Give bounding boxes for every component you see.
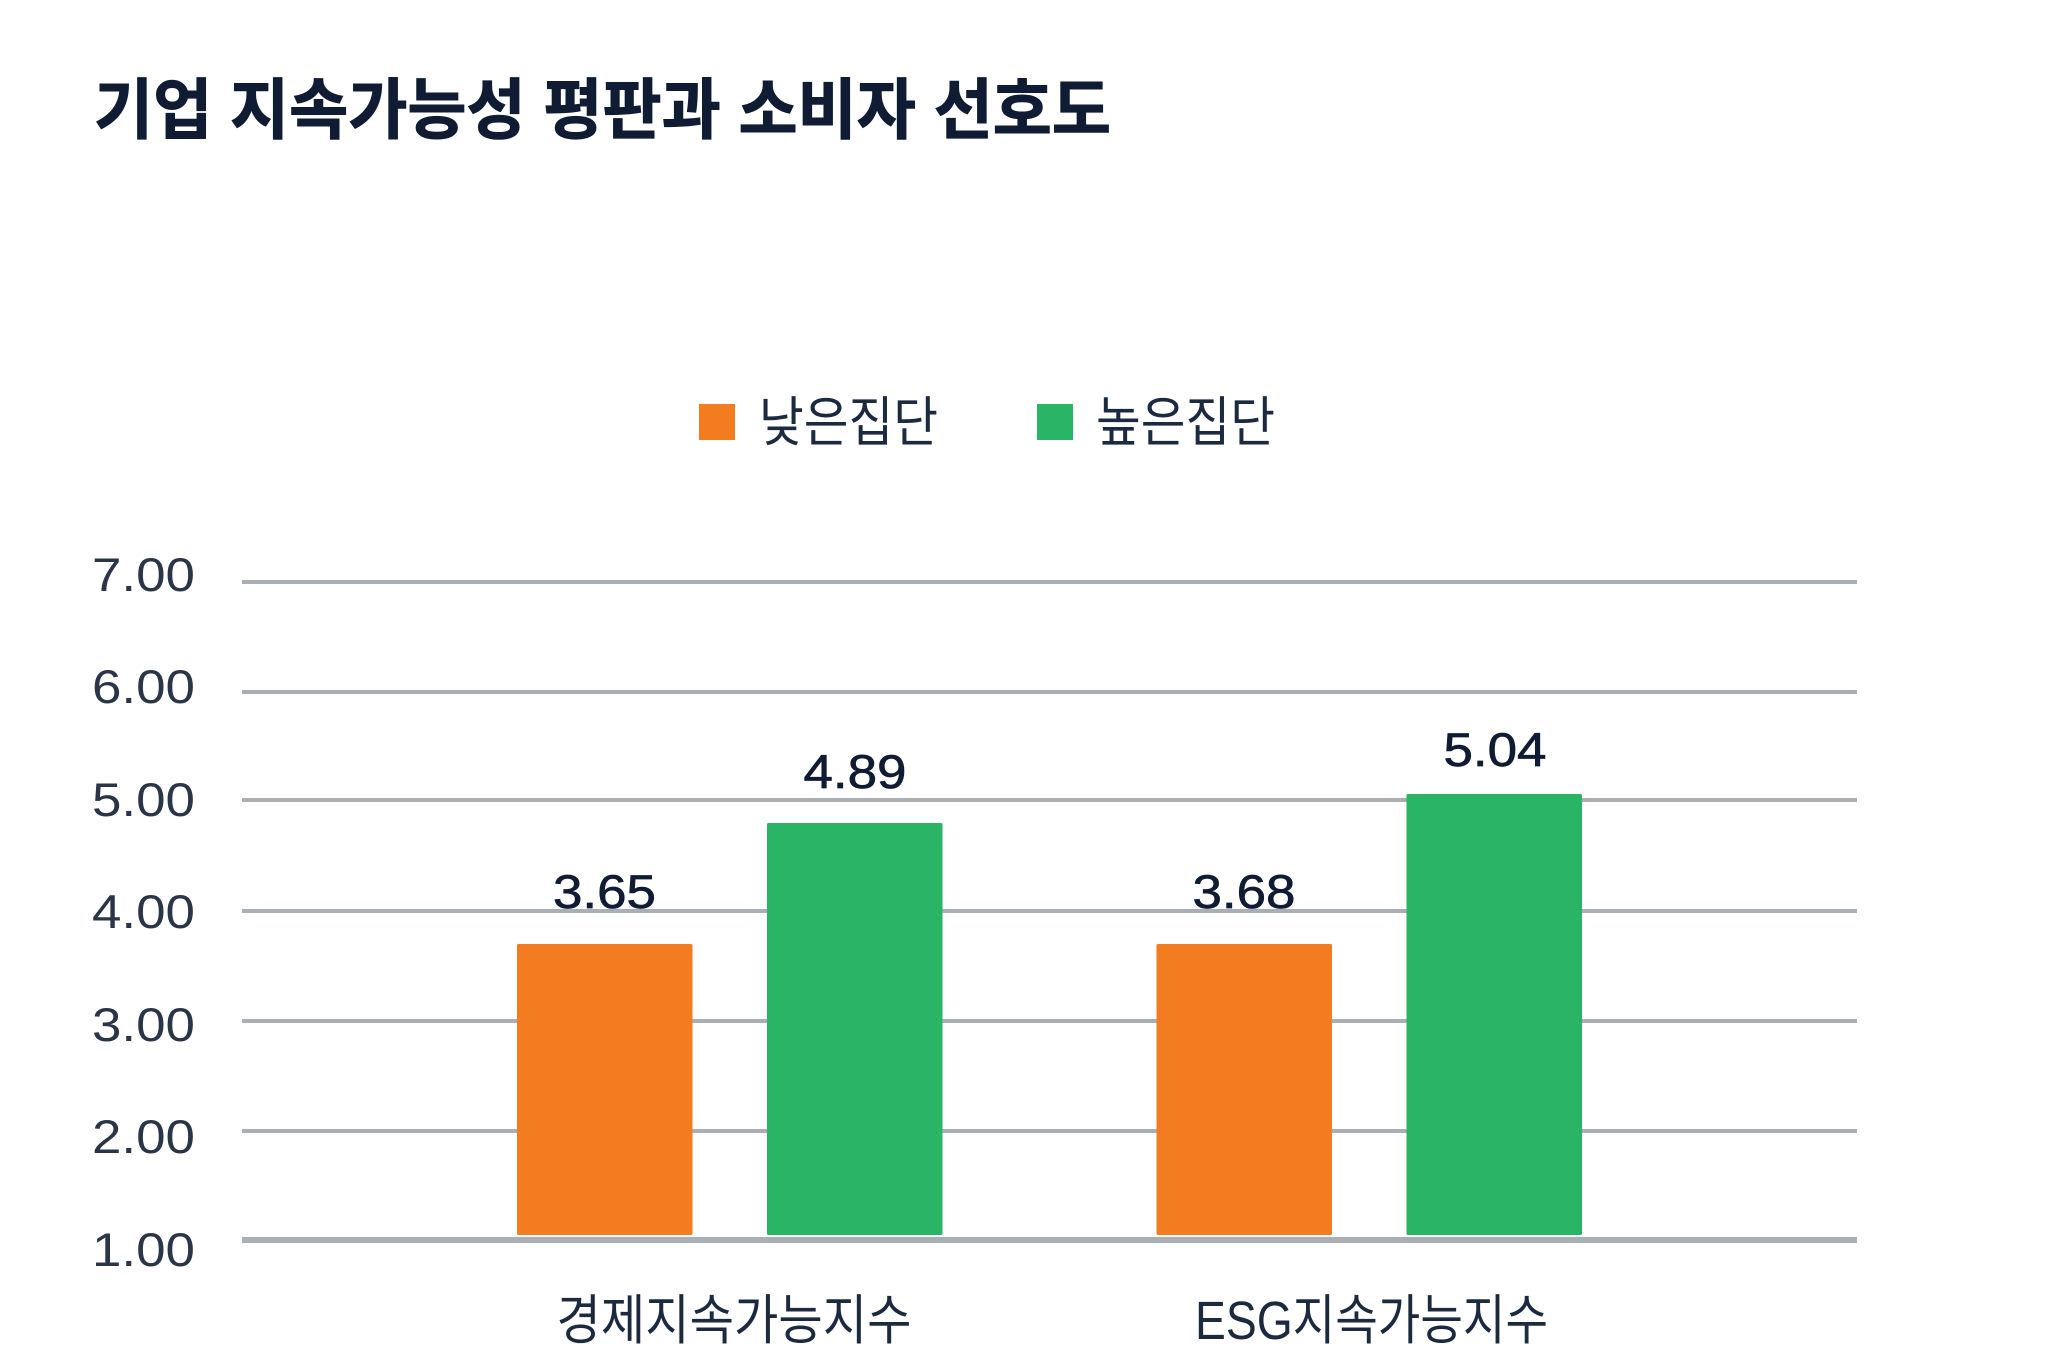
x axis labels	[556, 1291, 1548, 1351]
y axis labels: 3.00	[92, 998, 195, 1051]
x axis labels: ESG지속가능지수	[1195, 1291, 1548, 1351]
y axis labels: 7.00	[92, 548, 195, 601]
value labels: 3.65	[553, 865, 656, 918]
value labels: 5.04	[1444, 723, 1546, 776]
bar: economic index, high group	[767, 823, 942, 1235]
legend item: low group: 낮은집단	[759, 393, 938, 453]
legend	[699, 393, 1275, 453]
legend item: high group: 높은집단	[1096, 393, 1275, 453]
legend item: high group	[1037, 393, 1275, 453]
title: 기업 지속가능성 평판과 소비자 선호도	[94, 73, 1111, 147]
y axis labels: 4.00	[92, 885, 195, 938]
value labels	[553, 723, 1546, 918]
y axis labels: 2.00	[92, 1110, 195, 1163]
bar: ESG index, low group	[1156, 944, 1332, 1235]
y axis labels: 6.00	[92, 660, 195, 713]
bar: ESG index, high group	[1406, 794, 1582, 1235]
value labels: 4.89	[804, 745, 906, 798]
x axis labels: 경제지속가능지수	[556, 1291, 912, 1351]
bar chart	[92, 548, 1857, 1351]
y axis labels	[92, 548, 195, 1276]
y axis labels: 1.00	[92, 1223, 195, 1276]
y axis labels: 5.00	[92, 773, 195, 826]
value labels: 3.68	[1192, 865, 1296, 918]
legend item: low group	[699, 393, 938, 453]
bar: economic index, low group	[517, 944, 692, 1235]
